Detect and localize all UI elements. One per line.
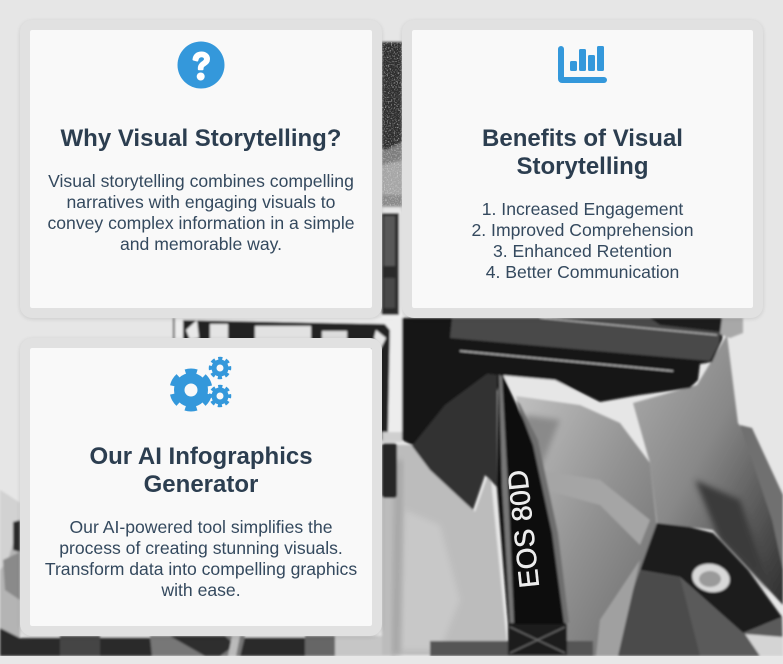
pocket flap xyxy=(640,523,782,633)
left shirt strip xyxy=(0,490,20,640)
icon: gears xyxy=(170,356,232,412)
body text: Visual storytelling combines compelling xyxy=(48,171,354,191)
body text: and memorable way. xyxy=(120,234,282,254)
shoulder and sleeve xyxy=(516,396,657,656)
heading: Generator xyxy=(144,471,258,498)
panel: benefits of visual storytelling xyxy=(402,20,763,318)
icon: question mark xyxy=(178,42,224,88)
numbered list: 3. Enhanced Retention xyxy=(493,241,672,261)
body text: convey complex information in a simple xyxy=(47,213,355,233)
heading xyxy=(89,443,313,498)
heading xyxy=(482,125,683,180)
arm xyxy=(633,335,783,605)
body text xyxy=(47,171,355,254)
numbered list: 2. Improved Comprehension xyxy=(472,220,694,240)
shirt collar xyxy=(412,373,497,510)
body text: Transform data into compelling graphics xyxy=(45,559,357,579)
icon: bar chart xyxy=(558,46,607,83)
strap xyxy=(497,375,567,655)
panel: why visual storytelling xyxy=(20,20,382,318)
strip between top cards xyxy=(382,42,402,152)
numbered list: 4. Better Communication xyxy=(486,262,679,282)
panel: our AI infographics generator xyxy=(20,338,382,636)
speckle on dark strip xyxy=(382,42,402,206)
body text: narratives with engaging visuals to xyxy=(67,192,335,212)
body text: with ease. xyxy=(161,580,241,600)
heading: Why Visual Storytelling? xyxy=(61,125,341,152)
strap lettering: EOS 80D xyxy=(502,469,545,589)
camera dark underside xyxy=(430,318,725,402)
button xyxy=(690,560,732,596)
body text: process of creating stunning visuals. xyxy=(59,538,343,558)
numbered list xyxy=(472,199,694,282)
dark shadow at face xyxy=(402,318,500,445)
lower right sleeve xyxy=(680,577,783,656)
bottom dark band xyxy=(0,628,390,656)
numbered list: 1. Increased Engagement xyxy=(482,199,683,219)
sky gap between camera and shoulder xyxy=(503,375,610,412)
body text xyxy=(45,517,357,600)
left shirt front xyxy=(382,445,508,655)
heading: Storytelling xyxy=(516,153,648,180)
camera body left xyxy=(173,318,402,443)
body text: Our AI-powered tool simplifies the xyxy=(69,517,333,537)
heading: Our AI Infographics xyxy=(89,443,313,470)
heading: Benefits of Visual xyxy=(482,125,683,152)
